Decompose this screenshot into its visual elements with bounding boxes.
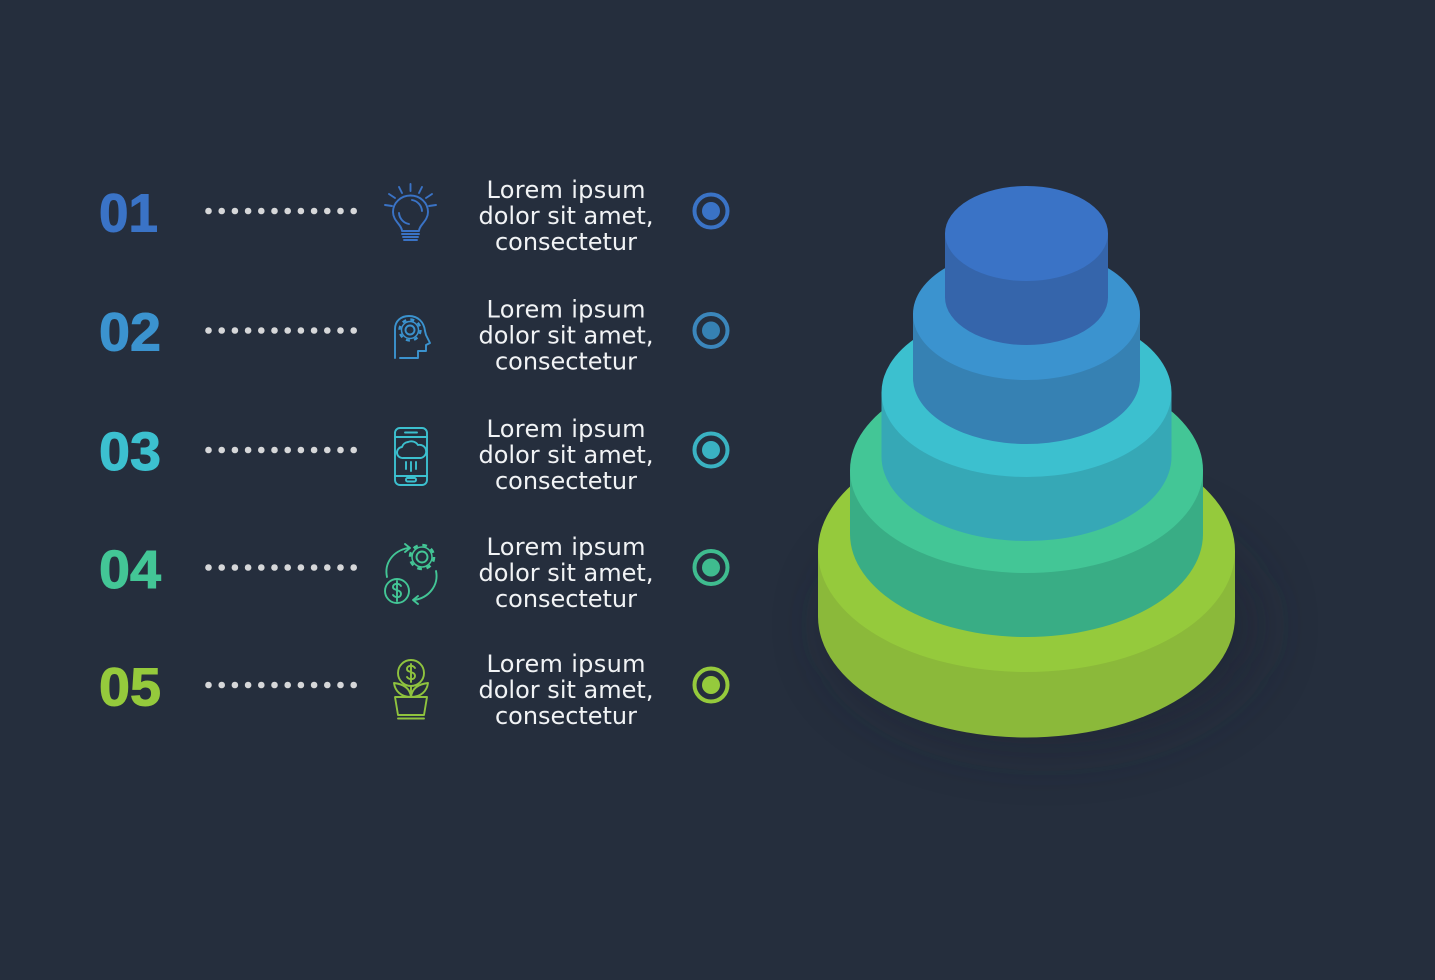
row 1 [99,176,728,256]
icon: head with gear [395,316,430,358]
text block 4: consectetur [495,585,637,613]
layer 5 [818,430,1235,738]
text block 3: dolor sit amet, [478,441,654,469]
icon: money and gear cycle [385,544,437,604]
layer 3 [882,308,1172,541]
text block 5: consectetur [495,702,637,730]
row 4 [99,533,728,613]
row 5 [99,650,728,730]
text block 5: dolor sit amet, [478,676,654,704]
marker 4 [694,551,728,584]
number 03: 03 [99,422,161,482]
cylinder shadow [830,505,1260,745]
text block 2: consectetur [495,348,637,376]
layer 2 [913,248,1140,444]
dotted connector 2 [205,327,357,334]
row 2 [99,296,728,376]
text block 1: dolor sit amet, [478,202,654,230]
number 05: 05 [99,658,161,718]
number 02: 02 [99,302,161,362]
marker 2 [694,314,728,347]
icon: light bulb [385,184,436,240]
text block 3: Lorem ipsum [486,415,646,443]
text block 2: dolor sit amet, [478,322,654,350]
marker 3 [694,434,728,466]
icon: phone with rain cloud [395,428,427,485]
dotted connector 5 [205,682,357,688]
dotted connector 3 [205,447,357,453]
number 01: 01 [99,184,158,244]
text block 1: Lorem ipsum [486,176,646,204]
chart: stacked cylinder pyramid [818,186,1260,745]
text block 1: consectetur [495,228,637,256]
marker 1 [694,194,728,228]
row 3 [99,415,728,495]
dotted connector 1 [205,208,357,214]
text block 5: Lorem ipsum [486,650,646,678]
dotted connector 4 [205,564,357,571]
text block 3: consectetur [495,467,637,495]
text block 4: Lorem ipsum [486,533,646,561]
text block 2: Lorem ipsum [486,296,646,324]
text block 4: dolor sit amet, [478,559,654,587]
layer 1 [945,186,1108,345]
icon: money plant [394,660,428,718]
layer 4 [850,367,1203,637]
number 04: 04 [99,540,161,600]
marker 5 [694,668,728,702]
